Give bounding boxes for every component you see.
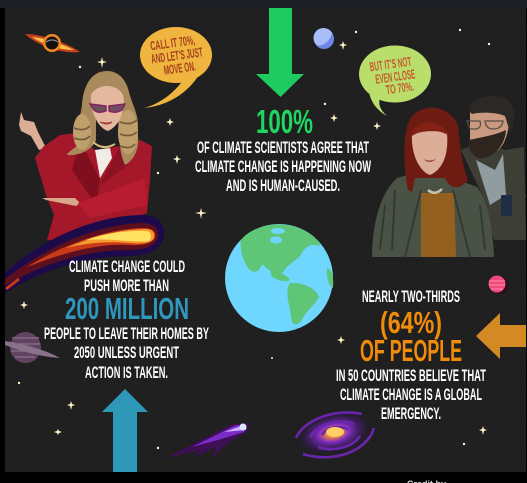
glasses (90, 104, 125, 112)
bottom strip (0, 472, 527, 483)
stat: 100 percent: AND IS HUMAN-CAUSED. (226, 176, 340, 195)
stat: 100 percent: 100% (256, 103, 313, 140)
illustration: woman with red hair (372, 108, 494, 257)
stat: 200 million: 2050 UNLESS URGENT (74, 343, 179, 362)
stat: 100 percent: OF CLIMATE SCIENTISTS AGREE THAT (197, 138, 369, 157)
blonde curled hair (67, 71, 138, 165)
stat: 200 million: PEOPLE TO LEAVE THEIR HOMES BY (44, 324, 209, 343)
globe (225, 224, 333, 332)
stat: 200 million: CLIMATE CHANGE COULD (69, 257, 185, 276)
stat: 100 percent (195, 103, 372, 195)
top bar (0, 0, 527, 8)
icon: black hole (25, 34, 80, 52)
icon: ringed planet (5, 332, 60, 363)
icon: blue planet (314, 28, 334, 49)
stat: 64 percent: EMERGENCY. (381, 404, 441, 423)
stat: 100 percent: CLIMATE CHANGE IS HAPPENING NOW (195, 157, 372, 176)
blazer (35, 133, 152, 240)
illustration: woman in red blazer (19, 71, 152, 240)
speech bubble: yellow: MOVE ON. (163, 58, 197, 78)
icon: comet (5, 215, 164, 293)
face (91, 86, 124, 131)
speech bubble: green: BUT IT'S NOT (369, 54, 412, 74)
speech bubble: green: TO 70%. (385, 79, 415, 97)
illustration: man with beard (461, 96, 526, 240)
raised hand and forearm (19, 112, 46, 150)
arrow: green down (256, 8, 304, 97)
speech bubble: yellow (140, 27, 212, 108)
stat: 200 million: ACTION IS TAKEN. (85, 363, 168, 382)
necklace (93, 142, 115, 147)
stat: 200 million: PUSH MORE THAN (84, 276, 169, 295)
stat: 64 percent: (64%) (380, 305, 442, 340)
speech bubble: green: EVEN CLOSE (374, 66, 416, 87)
icon: pink planet (488, 276, 509, 294)
speech bubble: green (359, 46, 431, 116)
speech bubble: yellow: CALL IT 70%, (149, 32, 196, 53)
icon: spiral galaxy (292, 405, 376, 461)
id badge (501, 195, 512, 216)
stat: 200 million: 200 MILLION (65, 291, 189, 326)
arrow: blue up (102, 389, 148, 472)
arrow: orange left (476, 313, 526, 359)
speech bubble: yellow: AND LET'S JUST (150, 44, 204, 66)
stat: 64 percent (336, 287, 486, 423)
icon: purple comet (166, 423, 249, 459)
stat: 200 million (44, 257, 209, 382)
